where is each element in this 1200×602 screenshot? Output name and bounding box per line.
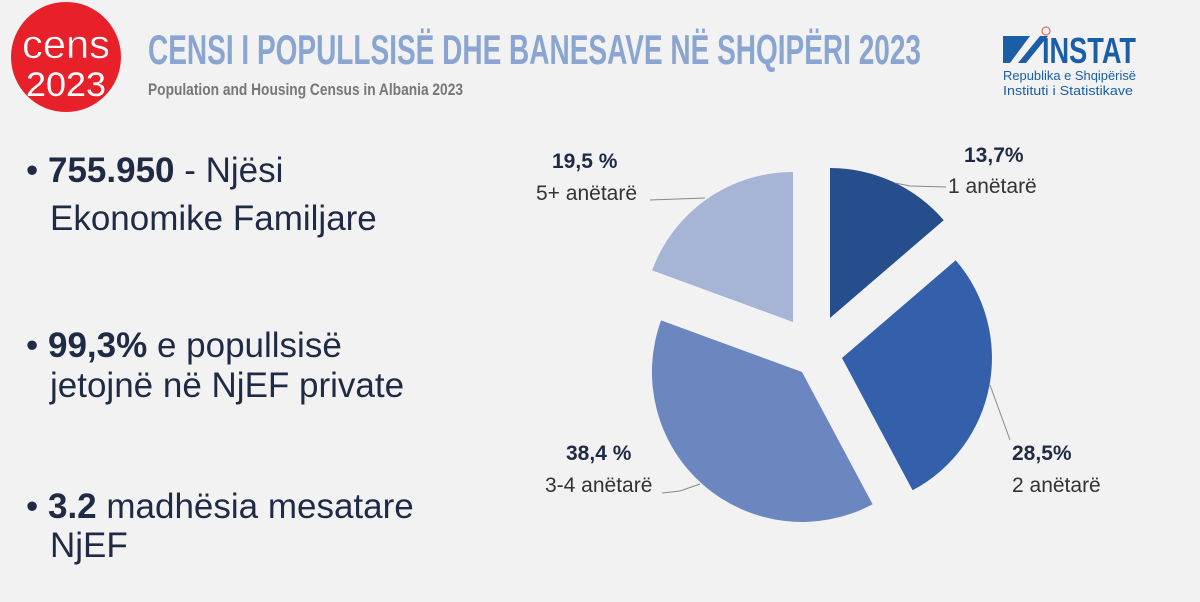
label: 19,5%: 19,5 %: [552, 150, 618, 173]
text block: economic units: [26, 151, 377, 238]
logo: INSTAT: Republika e Shqipërisë: [1003, 68, 1136, 83]
label: 13,7%: [895, 144, 1037, 198]
label: 38,4%: 38,4 %: [566, 442, 632, 465]
pie chart: [652, 168, 992, 522]
label: 13,7%: 1 anëtarë: [948, 175, 1037, 198]
logo: cens 2023: cens: [22, 23, 110, 67]
slice: 5+ members: [652, 172, 793, 322]
label: 28,5%: 2 anëtarë: [1012, 474, 1101, 497]
label: 19,5%: [536, 150, 705, 205]
slice: 2 members: [842, 260, 992, 490]
text block: average size: NjEF: [50, 526, 128, 565]
slice: 1 member: [830, 168, 944, 318]
label: 13,7%: 13,7%: [964, 144, 1024, 167]
text block: population share: [26, 326, 404, 405]
slice: 3-4 members: [652, 320, 873, 522]
logo: INSTAT: [1003, 27, 1136, 98]
text block: economic units: • 755.950 - Njësi: [26, 151, 283, 190]
text block: population share: • 99,3% e popullsisë: [26, 326, 342, 365]
logo: cens 2023: [11, 2, 121, 112]
label: 19,5%: 5+ anëtarë: [536, 182, 637, 205]
text block: average size: • 3.2 madhësia mesatare: [26, 487, 414, 526]
label: 28,5%: [990, 385, 1101, 497]
logo: INSTAT: Instituti i Statistikave: [1003, 83, 1133, 98]
label: 38,4%: [545, 442, 700, 497]
logo: INSTAT: INSTAT: [1042, 30, 1136, 71]
label: 38,4%: 3-4 anëtarë: [545, 474, 652, 497]
text block: population share: jetojnë në NjEF private: [49, 366, 404, 405]
subtitle: Population and Housing Census in Albania 2023: [148, 80, 463, 99]
text block: average size: [26, 487, 414, 565]
text block: economic units: Ekonomike Familjare: [50, 199, 377, 238]
label: 28,5%: 28,5%: [1012, 442, 1072, 465]
logo: cens 2023: 2023: [26, 66, 106, 104]
